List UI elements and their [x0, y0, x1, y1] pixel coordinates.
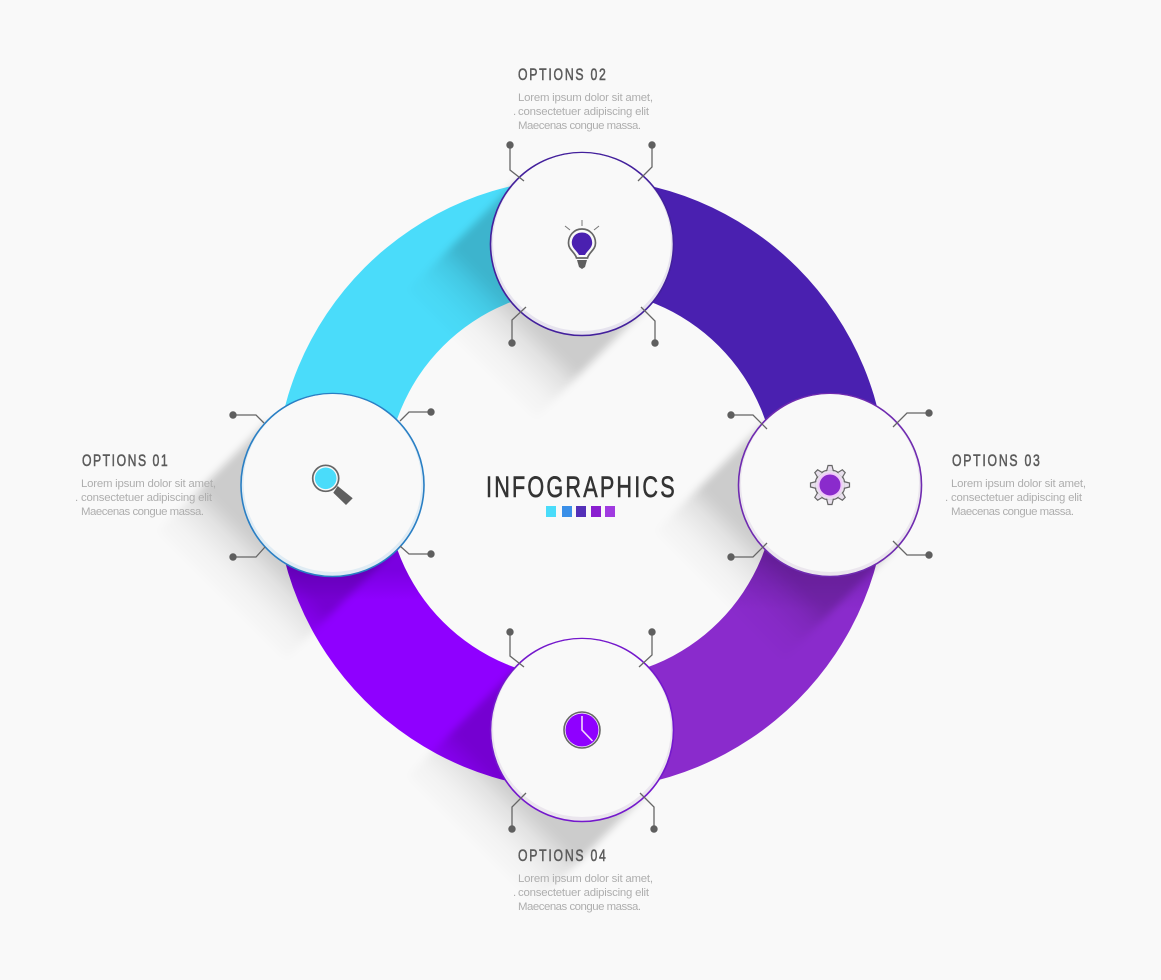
segment: cyan, top left	[275, 178, 581, 484]
node: options 01 (left)	[229, 394, 435, 576]
node: options 04 (bottom)	[490, 628, 674, 833]
circle face	[244, 394, 422, 572]
body: consectetuer adipiscing elit	[518, 887, 650, 899]
body: Maecenas congue massa.	[81, 506, 204, 518]
segment: violet, bottom left	[275, 484, 581, 790]
body: Lorem ipsum dolor sit amet,	[81, 478, 216, 490]
connector: bottom right	[640, 793, 658, 833]
body: Lorem ipsum dolor sit amet,	[518, 873, 653, 885]
connector: bottom right	[641, 307, 659, 347]
circle	[490, 638, 674, 822]
heading: OPTIONS 03	[952, 452, 1040, 471]
heading: OPTIONS 04	[518, 847, 606, 866]
circle	[490, 152, 674, 336]
circle	[738, 394, 922, 576]
circle face	[493, 153, 671, 331]
body	[513, 92, 653, 132]
body: .	[513, 887, 516, 899]
segment: purple, bottom right	[581, 484, 887, 790]
body: Maecenas congue massa.	[518, 901, 641, 913]
connector: top right	[639, 628, 656, 667]
connector: bottom left	[508, 793, 526, 833]
connector: top right	[400, 408, 435, 421]
long shadows cast by the circles	[158, 180, 894, 904]
icon: light bulb	[565, 220, 599, 269]
connector: bottom left	[727, 543, 767, 561]
text block: options 03	[945, 452, 1086, 518]
text block: options 02	[513, 66, 653, 132]
connector: top right	[893, 409, 933, 427]
icon: clock	[564, 712, 600, 748]
ring: four coloured segments	[275, 178, 887, 790]
icon: gear	[810, 466, 850, 504]
body: Maecenas congue massa.	[951, 506, 1074, 518]
connector: top right	[638, 141, 656, 181]
circle	[241, 394, 424, 576]
heading: OPTIONS 02	[518, 66, 606, 85]
body: Maecenas congue massa.	[518, 120, 641, 132]
node: options 03 (right)	[727, 394, 933, 576]
shadow: right circle	[656, 421, 894, 659]
heading: OPTIONS 01	[82, 452, 168, 471]
body: Lorem ipsum dolor sit amet,	[518, 92, 653, 104]
connector: bottom left	[508, 307, 526, 347]
body: consectetuer adipiscing elit	[951, 492, 1083, 504]
node: options 02 (top)	[490, 141, 674, 347]
heading: infographics: INFOGRAPHICS	[486, 469, 675, 504]
shadow: left circle	[158, 421, 396, 659]
connector: top left	[727, 411, 767, 429]
shadow: top circle	[408, 180, 646, 418]
body	[513, 873, 653, 913]
connector: bottom left	[229, 547, 265, 561]
centre title	[486, 469, 675, 517]
icon: magnifying glass	[313, 465, 353, 505]
body: Lorem ipsum dolor sit amet,	[951, 478, 1086, 490]
connector: bottom right	[400, 546, 435, 558]
body: consectetuer adipiscing elit	[518, 106, 650, 118]
text block: options 01	[75, 452, 216, 518]
connector: top left	[506, 141, 524, 181]
segment: indigo, top right	[581, 178, 887, 484]
connector: bottom right	[893, 541, 933, 559]
body: .	[75, 492, 78, 504]
body: .	[513, 106, 516, 118]
body: consectetuer adipiscing elit	[81, 492, 213, 504]
body: .	[945, 492, 948, 504]
circle face	[741, 394, 919, 572]
circle face	[493, 639, 671, 817]
text block: options 04	[513, 847, 653, 913]
connector: top left	[506, 628, 524, 667]
connector: top left	[229, 411, 264, 423]
shadow: bottom circle	[408, 666, 646, 904]
body	[945, 478, 1086, 518]
colour squares	[546, 506, 615, 517]
body	[75, 478, 216, 518]
